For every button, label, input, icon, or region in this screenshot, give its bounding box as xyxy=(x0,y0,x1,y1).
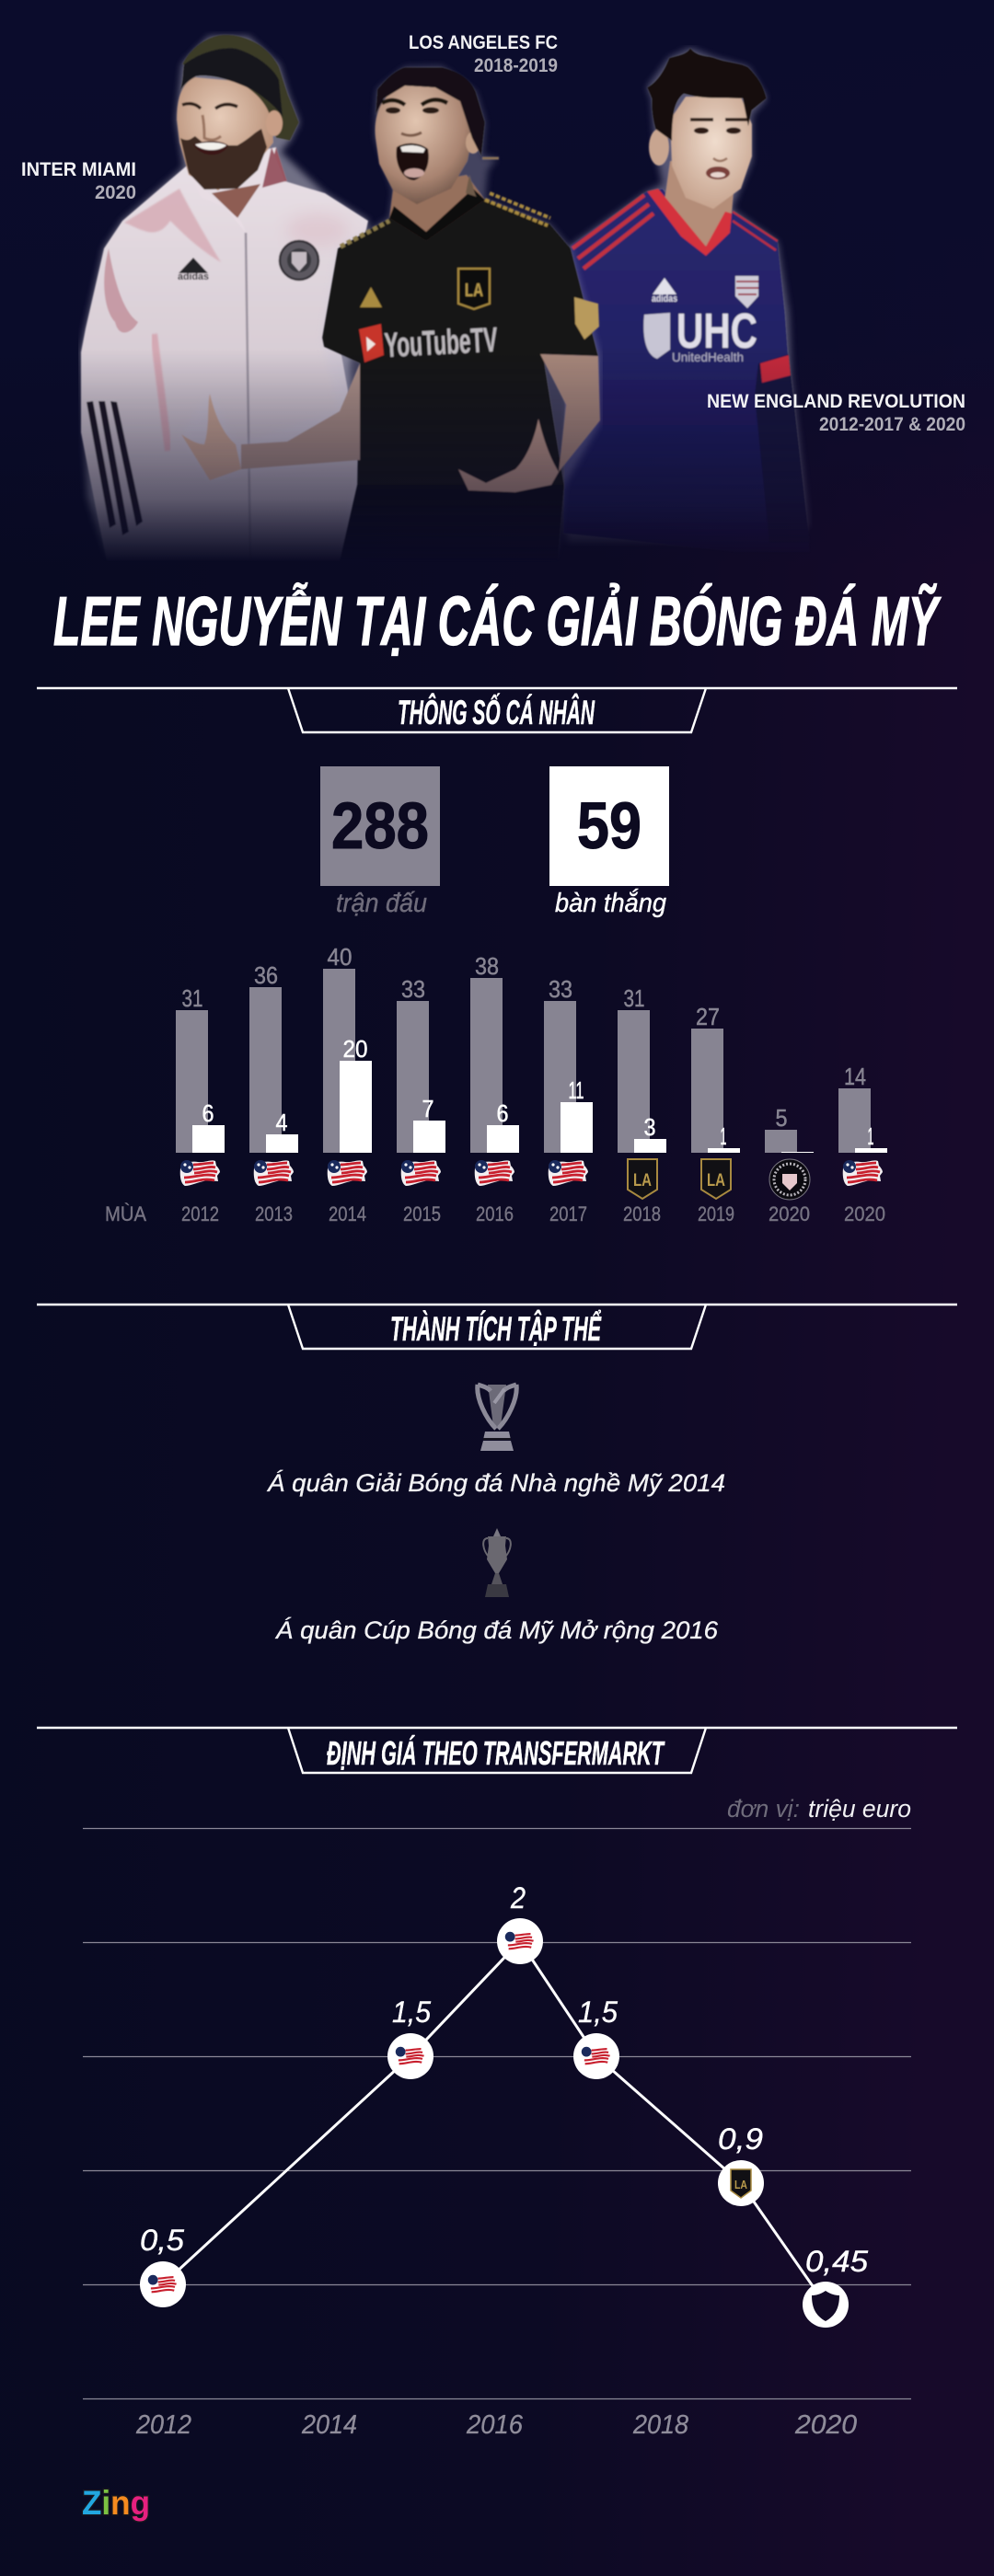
x axis years: 2012 xyxy=(135,2410,191,2440)
data point 2: 2 xyxy=(510,1881,526,1915)
stat card: goals: 59 xyxy=(577,790,641,863)
season axis labels: 2013 xyxy=(255,1202,293,1225)
x axis years: 2020 xyxy=(794,2410,857,2440)
matches values: 31 xyxy=(182,984,202,1012)
matches values: 31 xyxy=(624,984,644,1012)
icon: US Open Cup trophy xyxy=(483,1528,511,1597)
data point 0,5: 0,5 xyxy=(140,2224,184,2257)
icons: Revolution club crest 2014 xyxy=(328,1160,367,1186)
matches values: 27 xyxy=(696,1003,720,1030)
hero: three player portraits xyxy=(81,35,810,561)
goals values: 4 xyxy=(276,1109,287,1136)
data point 1,5 (2015): 1,5 xyxy=(392,1995,431,2029)
club label: Los Angeles FC: LOS ANGELES FC xyxy=(409,32,558,53)
section: personal stats xyxy=(37,688,957,1225)
club label: Inter Miami: INTER MIAMI xyxy=(21,159,136,180)
season axis labels: 2020 xyxy=(769,1202,810,1225)
matches values: 36 xyxy=(254,961,278,989)
player: New England Revolution: UnitedHealth xyxy=(672,350,744,364)
icons: Revolution club crest 2012 xyxy=(180,1160,220,1186)
icons: Inter Miami crest 2020 xyxy=(769,1159,810,1200)
section header: team achievements: THÀNH TÍCH TẬP THỂ xyxy=(390,1309,602,1348)
value line xyxy=(163,1941,826,2305)
icons: Revolution club crest 2016 xyxy=(475,1160,514,1186)
brand: adidas on Revolution shirt: adidas xyxy=(652,293,677,305)
background top fade xyxy=(0,0,994,570)
crest: LAFC on shirt xyxy=(458,269,490,309)
crest: Inter Miami on jacket xyxy=(280,241,318,280)
icons: Revolution club crest 2020 xyxy=(843,1160,883,1186)
goals values: 6 xyxy=(497,1099,508,1127)
season axis labels: 2012 xyxy=(181,1202,219,1225)
season axis labels: 2015 xyxy=(403,1202,441,1225)
icons: LAFC crest 2018: LA xyxy=(633,1171,652,1190)
club label: New England Revolution: 2012-2017 & 2020 xyxy=(819,414,965,435)
data point 0,45 xyxy=(803,2245,868,2328)
season axis labels: MÙA xyxy=(105,1202,146,1225)
stat card: goals: bàn thắng xyxy=(555,888,666,918)
data point 1,5 (2017): 1,5 xyxy=(578,1995,618,2029)
stat card: matches: 288 xyxy=(331,790,429,863)
goals values: 11 xyxy=(569,1076,584,1104)
matches values xyxy=(182,943,866,1132)
goals values xyxy=(202,1035,874,1150)
player: Los Angeles FC xyxy=(181,66,600,561)
player: New England Revolution xyxy=(563,48,810,552)
data point 2 xyxy=(497,1881,543,1964)
season axis labels: 2020 xyxy=(844,1202,885,1225)
sponsor: UHC: UHC xyxy=(676,304,757,359)
season axis labels: 2014 xyxy=(329,1202,366,1225)
section header: personal stats: THÔNG SỐ CÁ NHÂN xyxy=(398,693,595,731)
unit note: triệu euro xyxy=(808,1795,911,1823)
bar chart: matches and goals by season xyxy=(105,943,887,1225)
section header: valuation xyxy=(37,1728,957,1773)
data point 1,5 (2017) xyxy=(573,1995,619,2079)
section header: team achievements xyxy=(37,1305,957,1349)
matches values: 38 xyxy=(475,952,499,980)
club label: Inter Miami xyxy=(21,159,136,203)
achievement text: US Open Cup: Á quân Cúp Bóng đá Mỹ Mở rộng 2016 xyxy=(274,1616,719,1644)
season axis labels xyxy=(105,1202,885,1225)
matches values: 33 xyxy=(401,975,425,1003)
line chart: market value xyxy=(83,1829,911,2440)
club label: Los Angeles FC xyxy=(409,32,558,76)
section header: personal stats xyxy=(37,688,957,732)
matches values: 40 xyxy=(328,943,352,971)
data point 0,9 xyxy=(718,2122,764,2206)
unit note: đơn vị: xyxy=(727,1795,800,1823)
brand: adidas on jacket: adidas xyxy=(178,271,209,282)
goals values: 20 xyxy=(342,1035,368,1063)
data point 0,45: 0,45 xyxy=(805,2245,868,2278)
goals values: 3 xyxy=(644,1113,655,1141)
matches bars xyxy=(176,969,871,1153)
player: Inter Miami xyxy=(81,35,368,561)
icons: Revolution club crest 2017 xyxy=(549,1160,588,1186)
icons: Revolution club crest 2013 xyxy=(254,1160,294,1186)
data point 0,9: 0,9 xyxy=(718,2122,763,2156)
matches values: 33 xyxy=(549,975,572,1003)
goals values: 1 xyxy=(720,1122,727,1150)
matches values: 5 xyxy=(775,1104,788,1132)
season axis labels: 2017 xyxy=(549,1202,587,1225)
goals values: 6 xyxy=(202,1099,214,1127)
x axis years: 2016 xyxy=(466,2410,524,2440)
data point 1,5 (2015) xyxy=(387,1995,433,2079)
stat card: matches xyxy=(320,766,440,918)
season axis labels: 2019 xyxy=(698,1202,734,1225)
matches values: 14 xyxy=(844,1063,866,1090)
icons: LAFC crest 2018 xyxy=(628,1159,657,1199)
section: team achievements xyxy=(37,1305,957,1644)
club label: New England Revolution xyxy=(707,391,965,435)
x axis years xyxy=(135,2410,857,2440)
stat card: matches: trận đấu xyxy=(336,889,427,918)
bar chart: matches and goals by season: 1 xyxy=(867,1122,874,1150)
section header: valuation: ĐỊNH GIÁ THEO TRANSFERMARKT xyxy=(327,1734,665,1772)
icons: Revolution club crest 2015 xyxy=(401,1160,441,1186)
data point 0,9: LA xyxy=(734,2178,747,2191)
x axis years: 2018 xyxy=(632,2410,688,2440)
icon: MLS Cup trophy xyxy=(478,1385,516,1451)
crest: LAFC on shirt: LA xyxy=(465,281,483,301)
season axis labels: 2018 xyxy=(623,1202,661,1225)
achievement text: MLS Cup: Á quân Giải Bóng đá Nhà nghề Mỹ 2014 xyxy=(266,1469,725,1497)
goals bars xyxy=(192,1061,887,1153)
season axis labels: 2016 xyxy=(476,1202,514,1225)
section: Transfermarkt valuation xyxy=(37,1728,957,2440)
goals values: 7 xyxy=(422,1095,434,1122)
unit note xyxy=(727,1795,911,1823)
stat card: goals xyxy=(549,766,669,918)
logo: Zing: Zing xyxy=(82,2484,150,2522)
club label: New England Revolution: NEW ENGLAND REVOLUTION xyxy=(707,391,965,412)
icons: LAFC crest 2019 xyxy=(701,1159,731,1199)
club label: Los Angeles FC: 2018-2019 xyxy=(474,55,558,76)
club label: Inter Miami: 2020 xyxy=(95,182,136,203)
sponsor: YouTubeTV: YouTubeTV xyxy=(384,321,499,365)
data point 0,5 xyxy=(140,2224,186,2307)
icons: LAFC crest 2019: LA xyxy=(707,1171,725,1190)
x axis years: 2014 xyxy=(301,2410,357,2440)
